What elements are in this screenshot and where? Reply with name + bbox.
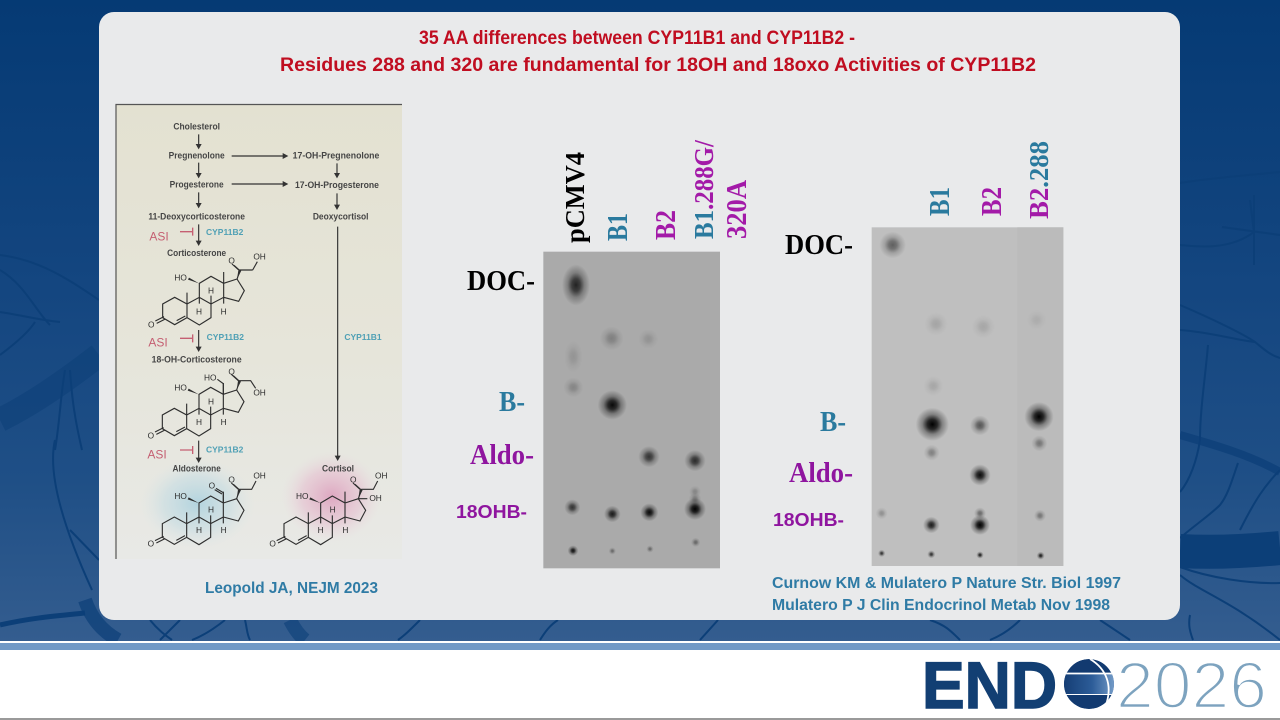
molecule: cortisol: OH	[369, 493, 382, 503]
molecule: aldosterone: O	[209, 481, 216, 491]
citation: Leopold: Leopold JA, NEJM 2023	[205, 580, 378, 597]
icon: globe	[1064, 659, 1114, 709]
gel 2 lane labels: B2.288	[1024, 141, 1054, 219]
gel 1 band labels: B-	[499, 387, 525, 418]
molecule: cortisol: O	[350, 475, 357, 485]
molecule: 18-OH-corticosterone: H	[196, 417, 202, 427]
citations: Curnow and Mulatero: Mulatero P J Clin Endocrinol Metab Nov 1998	[772, 597, 1110, 614]
enzyme and inhibitor labels: ASI	[148, 336, 168, 350]
pathway labels: 11-Deoxycorticosterone	[148, 211, 245, 221]
molecule: aldosterone: H	[208, 504, 214, 514]
molecule: cortisol: O	[269, 538, 276, 548]
molecule: corticosterone: H	[221, 306, 227, 316]
panel: steroid pathway	[114, 104, 402, 559]
pathway labels	[148, 121, 379, 474]
gel 1 lane labels: pCMV4	[560, 152, 590, 243]
pathway labels: 18-OH-Corticosterone	[152, 354, 242, 364]
pathway arrows	[196, 134, 341, 463]
gel 1 lane labels: B1.288G/	[689, 140, 719, 239]
molecule: 18-OH-corticosterone: O	[148, 430, 155, 440]
molecule: aldosterone: H	[221, 525, 227, 535]
footer band	[0, 641, 1280, 720]
gel 1 lane labels	[560, 140, 753, 243]
molecule: 18-OH-corticosterone: H	[221, 417, 227, 427]
main panel	[99, 12, 1180, 620]
molecule: aldosterone: H	[196, 525, 202, 535]
molecule: corticosterone: O	[228, 256, 235, 266]
molecule: cortisol: H	[342, 525, 348, 535]
molecule: 18-OH-corticosterone: HO	[204, 372, 217, 382]
enzyme and inhibitor labels: ASI	[149, 230, 169, 244]
molecule: aldosterone	[148, 470, 266, 548]
gel 1 band labels: DOC-	[467, 266, 535, 297]
glow: aldosterone	[141, 458, 254, 548]
pathway labels: Corticosterone	[167, 248, 226, 258]
gel 2 band labels: DOC-	[785, 230, 853, 261]
gel 2	[872, 227, 1063, 566]
gel 1 lane labels: B2	[651, 210, 682, 240]
pathway labels: Deoxycortisol	[313, 211, 368, 221]
gel 2 lane labels: B2	[977, 187, 1008, 216]
logo: ENDO 2026: 2026	[1116, 648, 1267, 720]
gel 2 band labels: B-	[820, 407, 846, 438]
molecule: aldosterone: O	[228, 475, 235, 485]
enzyme and inhibitor labels: CYP11B2	[206, 445, 244, 455]
gel 2 lane labels: B1	[925, 187, 956, 216]
citations: Curnow and Mulatero: Curnow KM & Mulatero P Nature Str. Biol 1997	[772, 575, 1121, 592]
molecule: cortisol: H	[318, 525, 324, 535]
molecule: corticosterone: O	[148, 320, 155, 330]
pathway labels: Aldosterone	[172, 464, 221, 474]
molecule: 18-OH-corticosterone: O	[228, 366, 235, 376]
title: Residues 288 and 320 are fundamental for 18OH and 18oxo Activities of CYP11B2	[280, 55, 1036, 76]
molecule: cortisol: H	[330, 504, 336, 514]
molecule: aldosterone: O	[148, 538, 155, 548]
gel 1 lane labels: 320A	[722, 179, 753, 239]
molecule: cortisol	[269, 470, 387, 548]
title: 35 AA differences between CYP11B1 and CYP11B2 -	[419, 28, 855, 49]
pathway labels: Cortisol	[322, 464, 354, 474]
gel 2 band labels: Aldo-	[789, 458, 853, 489]
enzyme and inhibitor labels: ASI	[147, 447, 167, 461]
molecule: 18-OH-corticosterone: HO	[174, 383, 187, 393]
pathway labels: Progesterone	[170, 180, 224, 190]
molecule: corticosterone: H	[208, 286, 214, 296]
gel 1 band labels	[456, 266, 535, 522]
molecule: corticosterone: HO	[174, 272, 187, 282]
logo: ENDO 2026	[926, 659, 1263, 709]
citations: Curnow and Mulatero	[772, 575, 1121, 614]
molecule: corticosterone: OH	[253, 252, 266, 262]
molecule: cortisol: HO	[296, 491, 309, 501]
enzyme and inhibitor labels	[147, 227, 382, 461]
molecule: cortisol: OH	[375, 470, 387, 480]
molecule: corticosterone: H	[196, 306, 202, 316]
pathway labels: 17-OH-Pregnenolone	[293, 151, 379, 161]
glow: cortisol	[282, 452, 382, 542]
gel 1 band labels: 18OHB-	[456, 502, 527, 522]
enzyme and inhibitor labels: CYP11B1	[344, 332, 382, 342]
molecule: 18-OH-corticosterone: OH	[253, 388, 266, 398]
pathway labels: 17-OH-Progesterone	[295, 180, 379, 190]
molecule: corticosterone	[148, 252, 266, 330]
gel 2 band labels: 18OHB-	[773, 510, 844, 530]
molecule: 18-OH-corticosterone: H	[208, 396, 214, 406]
logo: ENDO 2026: END	[922, 648, 1057, 720]
enzyme and inhibitor labels: CYP11B2	[206, 227, 244, 237]
gel 2 lane labels	[925, 141, 1054, 219]
molecule: aldosterone: OH	[253, 470, 266, 480]
pathway labels: Cholesterol	[173, 121, 220, 131]
gel 1 lane labels: B1	[603, 213, 634, 241]
gel 1	[543, 252, 720, 568]
enzyme and inhibitor labels: CYP11B2	[207, 332, 244, 342]
gel 2 band labels	[773, 230, 853, 530]
gel 1 band labels: Aldo-	[470, 440, 534, 471]
pathway labels: Pregnenolone	[169, 151, 225, 161]
molecule: 18-OH-corticosterone	[148, 366, 266, 440]
molecule: aldosterone: HO	[174, 491, 187, 501]
title	[280, 28, 1036, 76]
